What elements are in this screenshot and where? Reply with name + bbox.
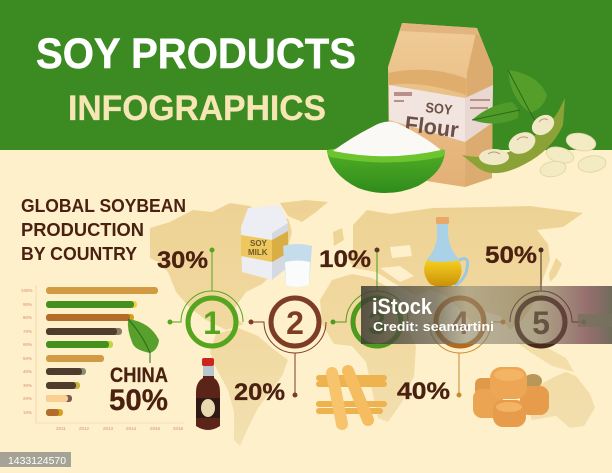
percent labels: 10% [319,246,371,273]
bar chart: 100% [21,288,33,293]
icon: loose soybeans [539,131,607,179]
subtitle: INFOGRAPHICS: INFOGRAPHICS [68,89,326,128]
bar chart: 60% [23,342,32,347]
icon: soy sauce bottle [196,358,220,430]
label: soy milk: MILK [248,248,268,257]
percent labels: 50% [485,242,537,269]
icon: soy milk carton and glass [241,205,312,287]
marker 2: 2 [286,305,304,341]
bar chart: 2014 [126,426,137,431]
marker 4 [429,298,506,398]
label: SOY: SOY [425,99,454,118]
callout: China 50%: CHINA [110,364,168,387]
bar chart: 2011 [56,426,66,431]
bar chart: 2015 [150,426,161,431]
icon: oil jar [424,217,468,287]
bar chart: 70% [23,329,32,334]
icon: leaf [128,319,159,363]
bar chart: 80% [23,315,32,320]
title: SOY PRODUCTS: SOY PRODUCTS [36,30,356,78]
label: soy milk: SOY [250,239,268,248]
watermark band [361,286,612,344]
marker 4: 4 [451,305,469,341]
callout: China 50%: 50% [109,384,168,417]
label: Flour: Flour [403,111,460,143]
bar chart: 10% [23,410,32,415]
marker 2 [248,298,326,398]
watermark: iStock: iStock [372,294,433,319]
heading: global soybean production by country: GLOBAL SOYBEAN [21,196,186,216]
label: soy milk [248,239,268,257]
icon: soybean leaves [472,70,547,124]
icon: tofu cubes [473,367,549,427]
marker 3 [330,248,408,346]
watermark: image id tag: 1433124570 [8,455,66,467]
marker 1: 1 [203,305,221,341]
watermark: grey block [578,314,612,327]
marker 5 [510,248,586,346]
bar chart: 2012 [79,426,90,431]
green header band [0,0,612,150]
bar chart: 40% [23,369,32,374]
heading: global soybean production by country: BY COUNTRY [21,244,137,264]
icon: yuba sticks [319,371,384,424]
world map [150,200,595,446]
icon: soybean pod [462,98,565,173]
marker 3: 3 [368,305,386,341]
watermark: image id tag [0,452,71,467]
heading: global soybean production by country [21,196,186,264]
icon: soy flour bag [388,23,493,187]
watermark: credit: Credit: seamartini [373,319,494,334]
icon: bowl of flour [327,122,445,193]
heading: global soybean production by country: PRODUCTION [21,220,144,240]
bar chart: 2013 [103,426,114,431]
percent labels: 30% [157,247,208,274]
bar chart [21,285,184,431]
percent labels [157,242,537,406]
bar chart: 2016 [173,426,184,431]
bar chart: 30% [23,383,32,388]
callout: China 50% [109,364,168,417]
marker 5: 5 [532,305,550,341]
percent labels: 20% [234,379,285,406]
bar chart: 20% [23,396,32,401]
percent labels: 40% [397,378,450,405]
marker 1 [168,248,243,346]
bar chart: 50% [23,356,32,361]
bar chart: 90% [23,302,32,307]
